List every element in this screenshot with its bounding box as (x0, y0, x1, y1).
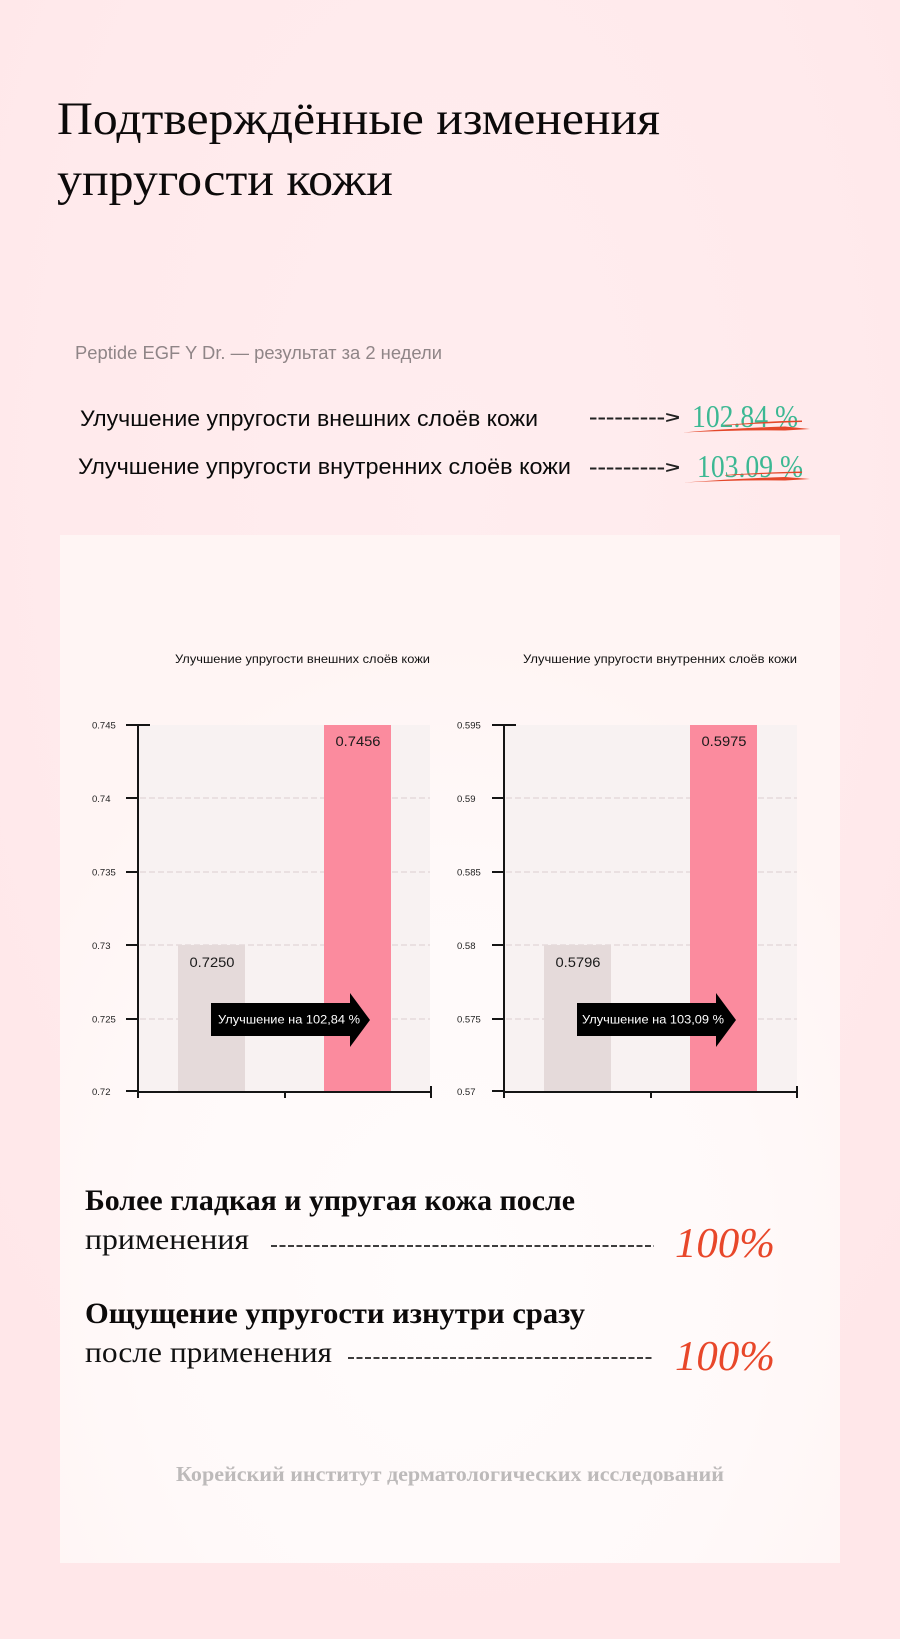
plot background (504, 725, 797, 1092)
value: 103.09 % (697, 448, 803, 484)
y axis labels: 0.59 (457, 794, 476, 805)
dashed leader (271, 1245, 654, 1247)
bar value: after: 0.5975 (702, 734, 746, 749)
y axis labels: 0.73 (92, 941, 110, 952)
bar: after (690, 725, 757, 1092)
y axis labels: 0.72 (92, 1087, 110, 1098)
title: упругости кожи (57, 154, 393, 206)
y axis labels: 0.725 (92, 1014, 116, 1026)
panel: charts and results (60, 535, 840, 1563)
y axis labels: 0.735 (92, 868, 116, 878)
chart title: Улучшение упругости внешних слоёв кожи (175, 652, 430, 666)
plot background (138, 725, 430, 1092)
dashed leader (348, 1357, 652, 1359)
subtitle: Peptide EGF Y Dr. — результат за 2 недели (75, 343, 442, 363)
bar value: after: 0.7456 (336, 734, 380, 749)
result: firmness from within (85, 1297, 775, 1380)
chart: inner layer elasticity (457, 652, 797, 1098)
y axis labels: 0.57 (457, 1087, 476, 1098)
continuation: применения (85, 1223, 249, 1256)
y axis labels: 0.74 (92, 794, 110, 805)
red underline (683, 420, 810, 432)
source credit: Корейский институт дерматологических исследований (176, 1462, 724, 1486)
bar value: before: 0.5796 (556, 955, 600, 970)
result: smoother skin (85, 1184, 775, 1267)
value: 100% (675, 1334, 775, 1380)
continuation: после применения (85, 1336, 332, 1369)
dashed arrow: ---------> (589, 408, 680, 427)
title (57, 93, 660, 206)
bar: after (324, 725, 391, 1092)
gridlines (140, 798, 430, 1019)
axes (126, 725, 431, 1098)
row label: Улучшение упругости внутренних слоёв кожи (78, 454, 571, 479)
y axis labels: 0.58 (457, 941, 476, 952)
value: 102.84 % (692, 398, 798, 434)
arrow: improvement: Улучшение на 102,84 % (218, 1012, 360, 1026)
bold heading: Более гладкая и упругая кожа после (85, 1184, 575, 1217)
title: Подтверждённые изменения (57, 93, 660, 145)
arrow: improvement (577, 993, 736, 1047)
y axis labels: 0.595 (457, 720, 481, 732)
axes (492, 725, 797, 1098)
result row: inner layers (78, 448, 810, 484)
y axis labels (92, 720, 116, 1098)
chart title: Улучшение упругости внутренних слоёв кожи (523, 652, 797, 666)
dashed arrow: ---------> (589, 458, 680, 477)
red underline (684, 472, 810, 482)
row label: Улучшение упругости внешних слоёв кожи (80, 406, 538, 431)
gridlines (506, 798, 797, 1019)
bar: before (544, 945, 611, 1092)
y axis labels (457, 720, 481, 1098)
y axis labels: 0.575 (457, 1014, 481, 1026)
value: 100% (675, 1221, 775, 1267)
arrow: improvement (211, 993, 370, 1047)
bar value: before: 0.7250 (190, 955, 234, 970)
bar: before (178, 945, 245, 1092)
arrow: improvement: Улучшение на 103,09 % (582, 1012, 724, 1026)
bold heading: Ощущение упругости изнутри сразу (85, 1297, 585, 1330)
y axis labels: 0.745 (92, 720, 116, 732)
result row: outer layers (80, 398, 810, 434)
chart: outer layer elasticity (92, 652, 431, 1098)
y axis labels: 0.585 (457, 868, 481, 878)
